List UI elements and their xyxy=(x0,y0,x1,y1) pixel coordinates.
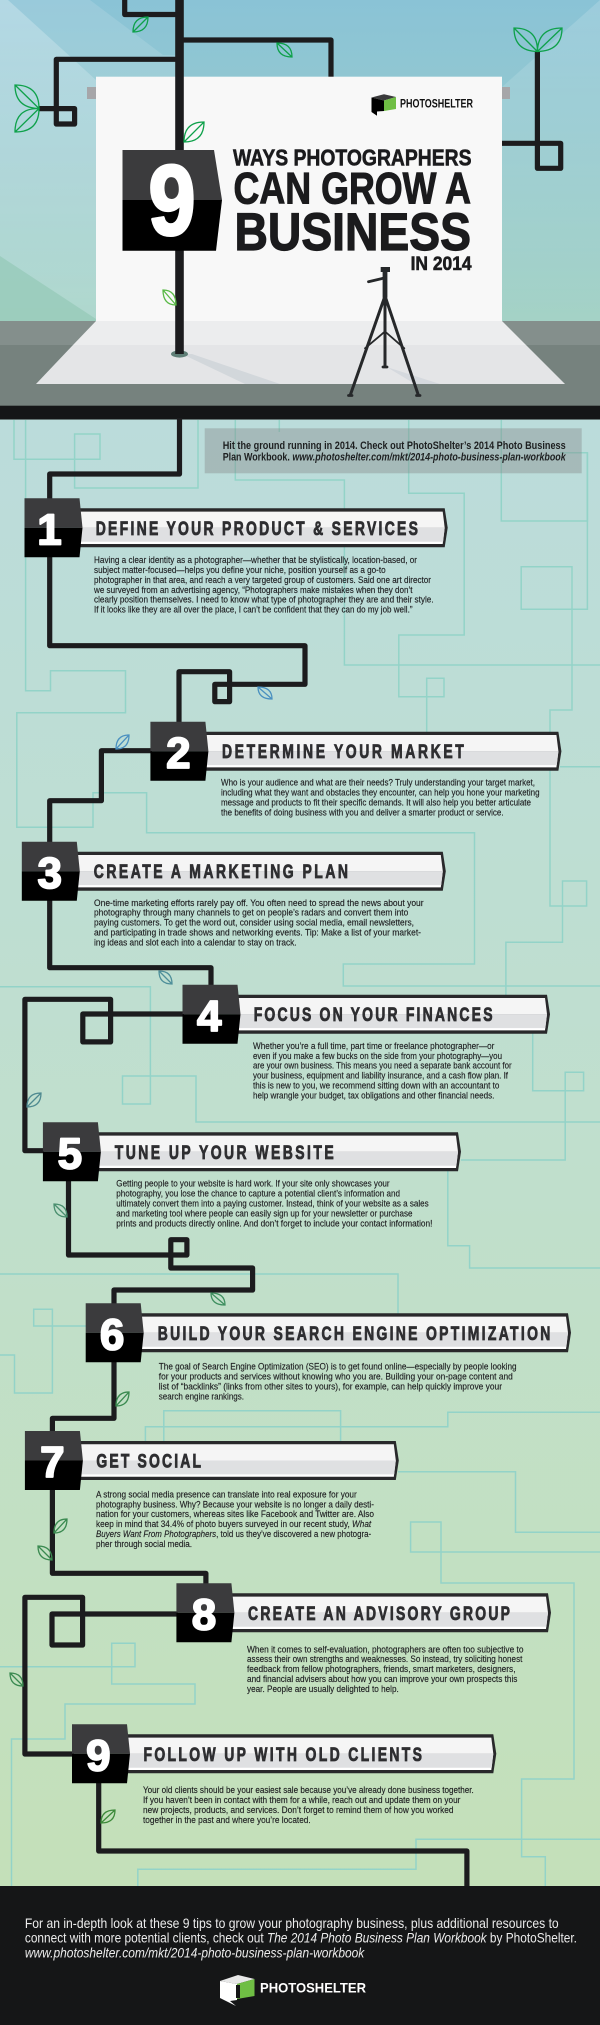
step 1 body text: If it looks like they are all over the place, I can’t be confident that they can do my job well.” xyxy=(94,605,412,616)
step 9 body text xyxy=(143,1785,474,1826)
step 6 heading xyxy=(86,1303,571,1362)
leaves: right sprout xyxy=(514,28,562,52)
step 4 body text: this is new to you, we recommend sitting down with an accountant to xyxy=(253,1081,499,1092)
step 9 body text: If you haven’t been in contact with them for a while, reach out and update them on your xyxy=(143,1795,461,1806)
light facet top left xyxy=(0,0,96,321)
title xyxy=(233,145,472,275)
step 6 body text: for your products and services without knowing who you are. Building your on-page content and xyxy=(159,1371,513,1382)
step 3 heading: CREATE A MARKETING PLAN xyxy=(94,861,348,883)
step 7 body text xyxy=(96,1489,374,1550)
step 7 body text: keep in mind that 34.4% of photo buyers surveyed in our recent study, What xyxy=(96,1519,371,1530)
step 5 body text: prints and products directly online. And don’t forget to include your contact information! xyxy=(116,1218,432,1229)
tripod xyxy=(348,270,420,396)
step 3 body text xyxy=(94,898,424,949)
backdrop clips xyxy=(87,87,510,99)
connector pipes between steps xyxy=(25,418,467,1887)
footer text xyxy=(25,1916,577,1960)
top loop pipe xyxy=(125,0,179,14)
step 5 heading: TUNE UP YOUR WEBSITE xyxy=(115,1142,334,1163)
floor upper band xyxy=(0,321,600,345)
step 4 body text: help wrangle your budget, tax obligations and other financial needs. xyxy=(253,1091,494,1102)
left branch pipe with square xyxy=(39,59,179,124)
logo: PhotoShelter footer: PHOTOSHELTER xyxy=(260,1980,366,1995)
step 3 heading xyxy=(22,842,446,901)
step 6 body text: list of “backlinks” (links from other sites to yours), for example, can help quickly improve your xyxy=(159,1381,503,1392)
step 5 body text: and marketing tool where people can easily sign up for your newsletter or purchase xyxy=(116,1208,413,1219)
leaves along the pipes xyxy=(10,687,272,1823)
step 9 body text: together in the past and where you’re located. xyxy=(143,1815,311,1826)
main pole xyxy=(175,0,184,354)
step 4 heading: 4 xyxy=(197,992,222,1041)
step 9 heading xyxy=(72,1724,496,1783)
step 4 heading xyxy=(182,985,550,1044)
step 6 body text: search engine rankings. xyxy=(159,1391,244,1402)
step 7 heading: GET SOCIAL xyxy=(96,1450,201,1472)
step 6 heading: BUILD YOUR SEARCH ENGINE OPTIMIZATION xyxy=(158,1323,550,1344)
big number badge xyxy=(122,144,222,256)
floor paper upper xyxy=(73,321,526,345)
step 2 body text: including what they want and obstacles they encounter, can help you hone your marketing xyxy=(221,788,540,799)
right pipe with square xyxy=(502,51,561,168)
step 2 body text: the benefits of doing business with you and deliver a smarter product or service. xyxy=(221,808,504,819)
floor lower band xyxy=(0,345,600,406)
step 5 body text: photography, you lose the chance to capture a potential client’s information and xyxy=(116,1189,400,1200)
footer text: connect with more potential clients, check out The 2014 Photo Business Plan Workbook by PhotoShelter. xyxy=(25,1931,577,1946)
step 2 heading xyxy=(150,722,561,781)
step 1 body text: subject matter-focused—helps you define your niche, position yourself as a go-to xyxy=(94,565,386,576)
step 8 body text: and financial advisers about how you can improve your own prospects this xyxy=(247,1674,518,1685)
step 8 body text xyxy=(247,1644,524,1695)
step 8 heading: CREATE AN ADVISORY GROUP xyxy=(248,1603,510,1624)
title: IN 2014 xyxy=(411,253,472,275)
step 3 body text: photography through many channels to get on people’s radars and convert them into xyxy=(94,908,408,919)
step 6 body text: The goal of Search Engine Optimization (SEO) is to get found online—especially by people looking xyxy=(159,1361,517,1372)
step 1 body text: we surveyed from an advertising agency, “Photographers make mistakes when they don’t xyxy=(93,585,413,596)
step 8 heading xyxy=(176,1583,551,1642)
footer text: www.photoshelter.com/mkt/2014-photo-business-plan-workbook xyxy=(25,1945,365,1960)
step 8 body text: assess their own strengths and weaknesses. So instead, try soliciting honest xyxy=(247,1654,523,1665)
hero black bar xyxy=(0,406,600,420)
step 1 body text: photographer in that area, and reach a very targeted group of customers. Said one art director xyxy=(94,575,432,586)
big number badge: 9 xyxy=(148,144,196,256)
step 9 body text: Your old clients should be your easiest sale because you’ve already done business together. xyxy=(143,1785,474,1796)
step 1 heading: DEFINE YOUR PRODUCT & SERVICES xyxy=(96,518,418,539)
step 8 body text: feedback from fellow photographers, friends, smart marketers, designers, xyxy=(247,1664,516,1675)
step 7 heading xyxy=(25,1431,399,1490)
title: CAN GROW A xyxy=(234,164,471,214)
step 4 heading: FOCUS ON YOUR FINANCES xyxy=(254,1004,493,1026)
step 5 body text: ultimately convert them into a paying customer. Instead, think of your website as a sales xyxy=(116,1199,429,1210)
callout: workbook link xyxy=(205,428,582,473)
step 6 body text xyxy=(159,1361,517,1402)
leaves: hero small xyxy=(15,17,292,305)
step 2 heading: 2 xyxy=(166,729,191,778)
background circuit lines xyxy=(0,420,600,1886)
step 1 body text xyxy=(93,555,434,616)
step 1 body text: clearly position themselves. I need to know what type of photographer they are and their style. xyxy=(94,595,434,606)
step 7 heading: 7 xyxy=(40,1438,65,1487)
step 5 body text: Getting people to your website is hard work. If your site only showcases your xyxy=(116,1179,390,1190)
panel: footer xyxy=(0,1886,600,2025)
step 5 heading xyxy=(43,1122,461,1181)
step 5 heading: 5 xyxy=(58,1130,82,1179)
step 6 heading: 6 xyxy=(100,1311,124,1360)
step 3 body text: One-time marketing efforts rarely pay off. You often need to spread the news about your xyxy=(94,898,424,909)
step 1 body text: Having a clear identity as a photographer—whether that be stylistically, location-based, or xyxy=(94,555,418,566)
panel: hero studio scene xyxy=(0,0,600,420)
step 3 body text: paying customers. To get the word out, consider using social media, email newsletters, xyxy=(94,918,414,929)
step 4 body text: your business, equipment and liability insurance, and a cash flow plan. If xyxy=(253,1071,508,1082)
light facet top right xyxy=(502,0,600,321)
step 9 body text: new projects, products, and services. Don’t forget to remind them of how you worked xyxy=(143,1805,454,1816)
logo: PhotoShelter top xyxy=(372,94,473,116)
step 2 body text: Who is your audience and what are their needs? Truly understanding your target market, xyxy=(221,778,535,789)
pole shadow xyxy=(182,354,280,384)
sky backdrop xyxy=(0,0,600,321)
step 7 body text: nation for your customers, whereas sites like Facebook and Twitter are. Also xyxy=(96,1509,374,1520)
title: BUSINESS xyxy=(234,203,471,262)
step 3 heading: 3 xyxy=(38,849,62,898)
step 1 heading xyxy=(24,498,448,557)
logo: PhotoShelter footer xyxy=(220,1975,366,2006)
step 2 body text: message and products to fit their specific demands. It will also help you better articulate xyxy=(221,798,531,809)
step 8 heading: 8 xyxy=(192,1591,216,1640)
step 9 heading: 9 xyxy=(86,1732,111,1781)
step 7 body text: pher through social media. xyxy=(96,1539,192,1550)
panel: gradient body background xyxy=(0,420,600,1887)
dark facet lower left xyxy=(0,256,96,321)
step 4 body text: are your own business. This means you need a separate bank account for xyxy=(253,1061,512,1072)
step 5 body text xyxy=(116,1179,432,1229)
step 8 body text: When it comes to self-evaluation, photographers are often too subjective to xyxy=(247,1644,524,1655)
step 7 body text: Buyers Want From Photographers, told us they’ve discovered a new photogra- xyxy=(96,1529,371,1540)
step 4 body text: even if you make a few bucks on the side from your photography—you xyxy=(253,1051,502,1062)
step 2 body text xyxy=(221,778,540,819)
step 3 body text: and participating in trade shows and networking events. Tip: Make a list of your market- xyxy=(94,928,421,939)
floor paper lower xyxy=(36,345,565,384)
pole base xyxy=(171,350,188,358)
white photo backdrop xyxy=(96,77,502,321)
step 4 body text xyxy=(253,1041,512,1102)
title: WAYS PHOTOGRAPHERS xyxy=(233,145,472,171)
step 3 body text: ing ideas and slot each into a calendar to stay on track. xyxy=(94,938,297,949)
step 1 heading: 1 xyxy=(37,505,62,554)
mid facet top left xyxy=(0,0,176,321)
step 8 body text: year. People are usually delighted to help. xyxy=(247,1684,399,1695)
right top branch pipe xyxy=(180,40,331,78)
step 7 body text: photography business. Why? Because your website is no longer a daily desti- xyxy=(96,1499,374,1510)
tripod shadow xyxy=(387,367,440,384)
step 7 body text: A strong social media presence can translate into real exposure for your xyxy=(96,1489,357,1500)
step 9 heading: FOLLOW UP WITH OLD CLIENTS xyxy=(144,1744,422,1765)
step 4 body text: Whether you’re a full time, part time or freelance photographer—or xyxy=(253,1041,495,1052)
logo: PhotoShelter top: PHOTOSHELTER xyxy=(400,96,473,110)
step 2 heading: DETERMINE YOUR MARKET xyxy=(222,741,464,763)
